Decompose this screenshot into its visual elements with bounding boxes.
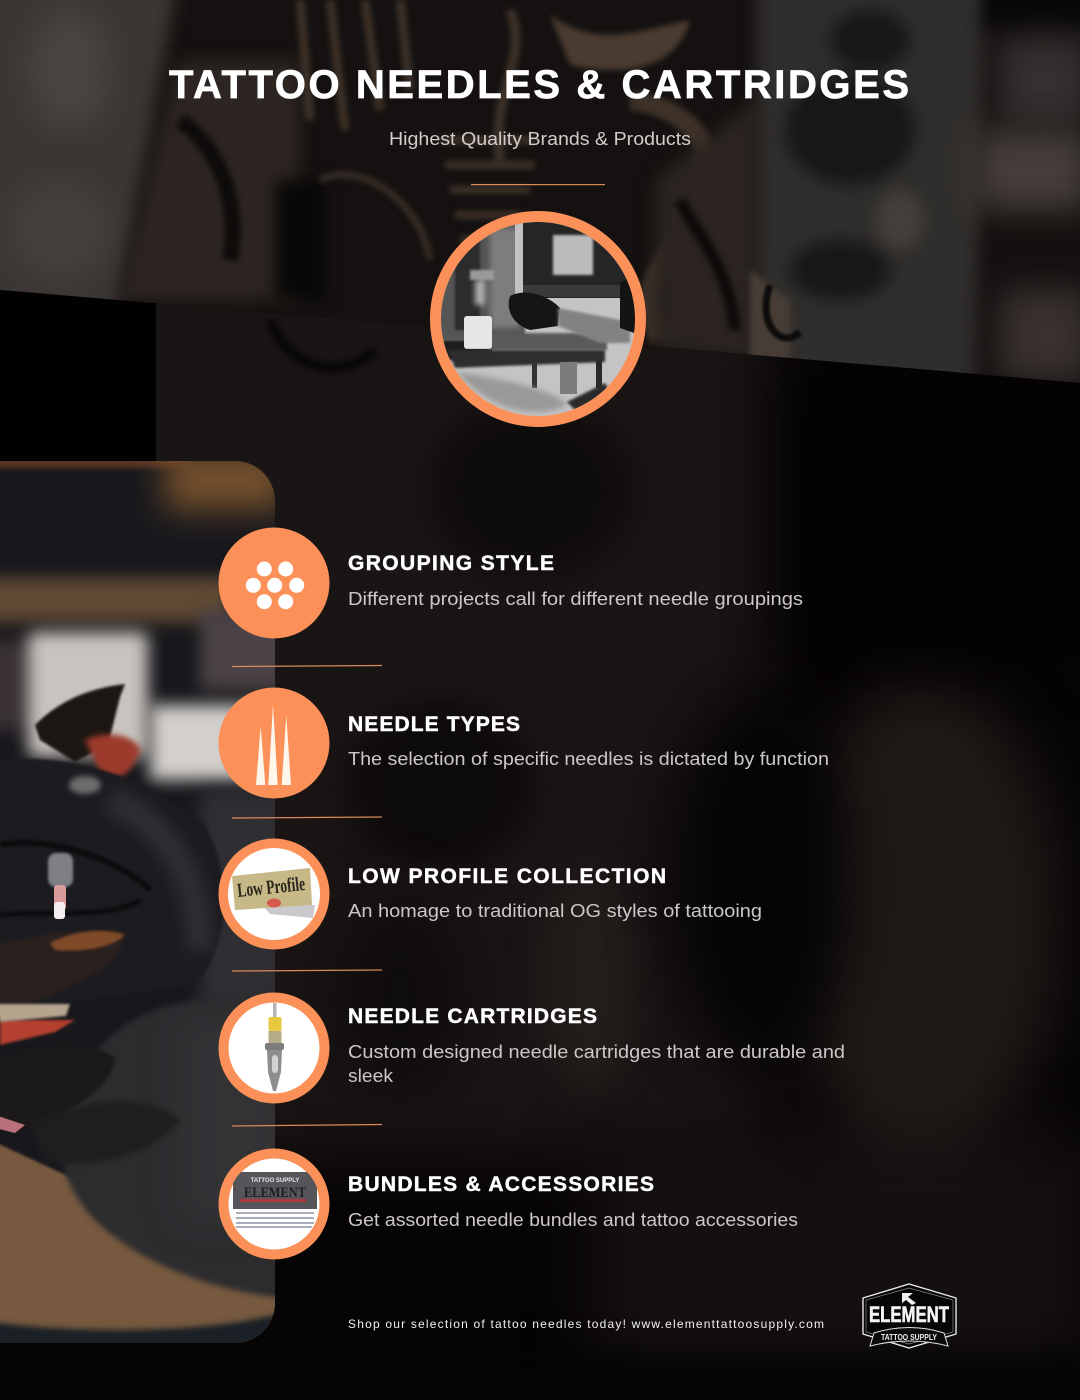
hero photo: tattoo studio in orange ring (430, 210, 650, 430)
heading: grouping style: GROUPING STYLE (348, 552, 554, 575)
heading: needle cartridges: NEEDLE CARTRIDGES (348, 1005, 597, 1028)
icon: element needle bundle (218, 1148, 330, 1260)
logo: element tattoo supply (863, 1284, 956, 1348)
background photo: dark hand, lower panel (0, 280, 1080, 1400)
text: needle cartridges description, second line: sleek (348, 1066, 394, 1086)
icon: low profile needle box (218, 838, 330, 950)
text: needle types description: The selection of specific needles is dictated by function (348, 749, 829, 769)
background photo: tattooed arm, top band (0, 0, 1080, 400)
logo: element tattoo supply: ELEMENT (869, 1302, 949, 1327)
row 4: needle cartridges (218, 992, 845, 1104)
heading: needle types: NEEDLE TYPES (348, 713, 520, 736)
icon: element needle bundle: TATTOO SUPPLY (251, 1178, 299, 1184)
text: grouping style description: Different projects call for different needle groupings (348, 589, 803, 609)
icon: three needles (218, 688, 330, 798)
row 5: bundles and accessories (218, 1148, 798, 1260)
footer call to action: Shop our selection of tattoo needles today! www.elementtattoosupply.com (348, 1317, 824, 1331)
icon: element needle bundle: ELEMENT (244, 1185, 306, 1201)
row 3: low profile collection (218, 838, 762, 950)
subtitle: Highest Quality Brands & Products (389, 129, 691, 149)
row 1: grouping style (218, 528, 803, 638)
heading: low profile collection: LOW PROFILE COLLECTION (348, 865, 666, 888)
text: bundles description: Get assorted needle bundles and tattoo accessories (348, 1210, 798, 1230)
row 2: needle types (218, 688, 829, 798)
logo: element tattoo supply: TATTOO SUPPLY (881, 1333, 938, 1342)
icon: needle grouping dots (218, 528, 330, 638)
text: needle cartridges description: Custom designed needle cartridges that are durable and (348, 1042, 845, 1062)
icon: needle cartridge (218, 992, 330, 1104)
title: TATTOO NEEDLES & CARTRIDGES (169, 63, 909, 107)
panel: tattoo artist photo (0, 450, 290, 1350)
icon: low profile needle box: Low Profile (236, 873, 306, 902)
heading: bundles and accessories: BUNDLES & ACCESSORIES (348, 1173, 654, 1196)
text: low profile description: An homage to traditional OG styles of tattooing (348, 901, 762, 921)
